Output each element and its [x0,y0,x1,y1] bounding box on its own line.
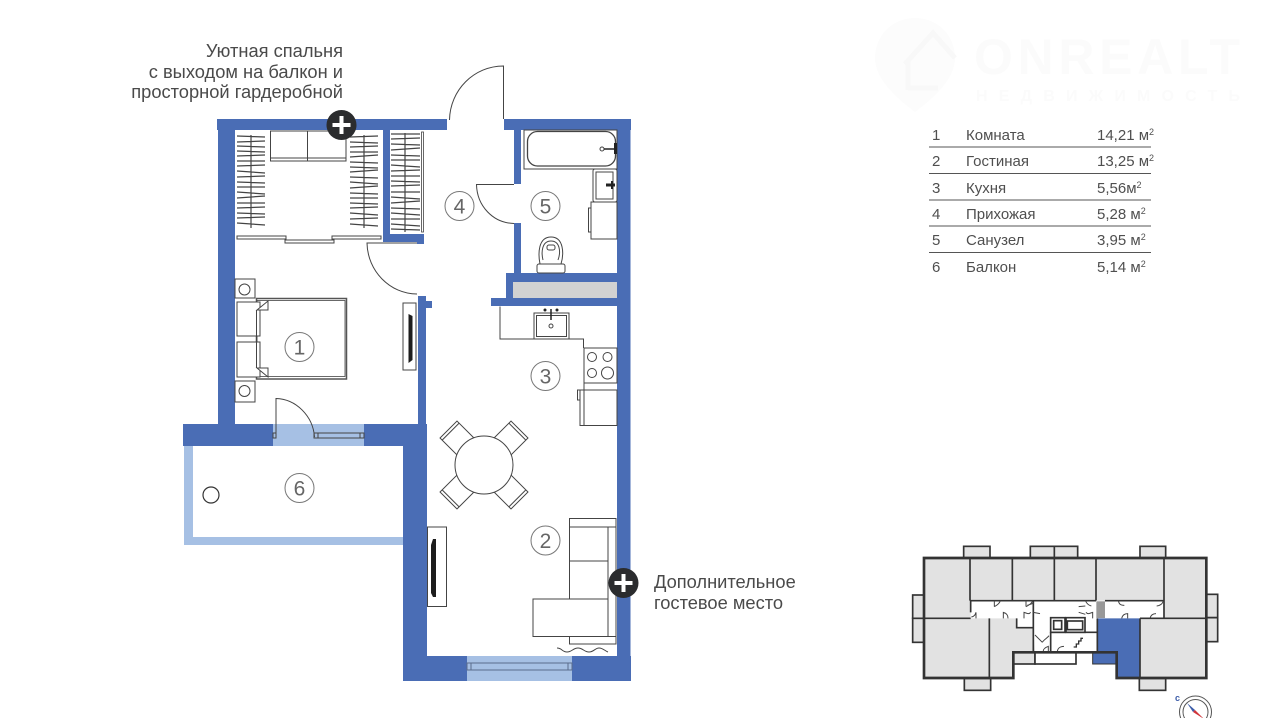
living room tv [428,527,446,606]
room number 3: 3 [540,366,551,388]
row 6 [932,259,1146,276]
row 2: Гостиная [966,153,1029,170]
row 1: 1 [932,127,940,144]
row 2: 2 [1149,153,1154,163]
row 4: 5,28 м [1097,206,1141,223]
callout text: guest place: гостевое место [654,592,783,613]
bathtub [524,130,617,169]
area table [929,127,1154,276]
fridge [578,390,617,426]
room number 2 [531,526,560,555]
callout text: guest place: Дополнительное [654,571,796,592]
room number 6: 6 [294,478,305,500]
nightstands [235,279,255,402]
room number 4 [445,192,474,220]
row 1: Комната [966,127,1025,144]
building outline [924,558,1206,678]
apartment balcony border [1093,652,1117,664]
balconies [913,546,1218,690]
stove [584,348,617,383]
row 1: 14,21 м [1097,127,1149,144]
bed [237,298,346,379]
watermark logo: НЕДВИЖИМОСТЬ [976,88,1240,105]
compass: с [1175,693,1180,703]
row 4: 4 [932,206,940,223]
row 5: 2 [1141,232,1146,242]
striped stair core [1096,601,1105,618]
partitions [924,558,1206,678]
dining table [455,436,513,494]
room number 3 [531,362,560,390]
sofa [533,518,616,652]
row 6: 6 [932,259,940,276]
plus marker: living room [608,568,638,598]
row 4 [932,206,1146,223]
floor key plan [913,546,1218,690]
outer walls [924,558,1206,678]
row 6: Балкон [966,259,1016,276]
compass [1175,693,1212,718]
entrance door [450,66,504,120]
apartment walls [183,119,631,681]
room number 5 [531,192,560,220]
stairs [1074,638,1083,647]
elevator shafts [1051,618,1085,632]
room number 2: 2 [540,530,551,553]
bedroom tv [403,303,416,370]
bathroom sink [593,169,617,202]
row 2: 2 [932,153,940,170]
room number 6 [285,474,314,502]
row 3: 2 [1137,180,1142,190]
room number 1 [285,332,314,362]
bedroom door [367,243,417,294]
row 5: 5 [932,232,940,249]
bedroom wardrobe left [237,135,265,228]
ventilation shaft [513,282,617,298]
highlighted apartment [1093,618,1140,678]
balcony circle [203,487,219,503]
callout text: bedroom: просторной гардеробной [131,81,343,102]
row 3: 5,56м [1097,180,1137,197]
kitchen counter [500,306,584,390]
washing machine [588,202,617,239]
sliding wardrobe doors [237,236,381,243]
entrance block [1035,652,1076,664]
balcony light walls [184,424,572,681]
room number 5: 5 [540,196,551,218]
plus marker: bedroom [326,110,356,140]
row 5: Санузел [966,232,1024,249]
toilet [537,237,565,273]
row 6: 5,14 м [1097,259,1141,276]
row 3: 3 [932,180,940,197]
row 4: 2 [1141,206,1146,216]
room number 4: 4 [454,196,466,218]
row 1 [932,127,1154,144]
row 2 [932,153,1154,170]
row 6: 2 [1141,259,1146,269]
bedroom wardrobe right [350,135,378,228]
row 2: 13,25 м [1097,153,1149,170]
closet wardrobe [391,132,424,232]
room number 1: 1 [294,336,305,360]
bathroom door [476,184,514,224]
row 5 [932,232,1146,249]
callout text: guest place [654,571,796,613]
door arcs [971,601,1163,652]
row 1: 2 [1149,127,1154,137]
callout text: bedroom [131,40,343,102]
row 5: 3,95 м [1097,232,1141,249]
row 3: Кухня [966,180,1006,197]
dining chairs [440,421,528,509]
row 3 [932,180,1142,197]
row 4: Прихожая [966,206,1036,223]
watermark logo [875,18,1240,112]
watermark logo: ONREALT [974,29,1240,85]
balcony door and window [273,398,364,438]
corridor [971,601,1163,652]
callout text: bedroom: Уютная спальня [206,40,343,61]
living room window [467,663,572,670]
callout text: bedroom: с выходом на балкон и [149,61,343,82]
dresser [270,131,346,161]
